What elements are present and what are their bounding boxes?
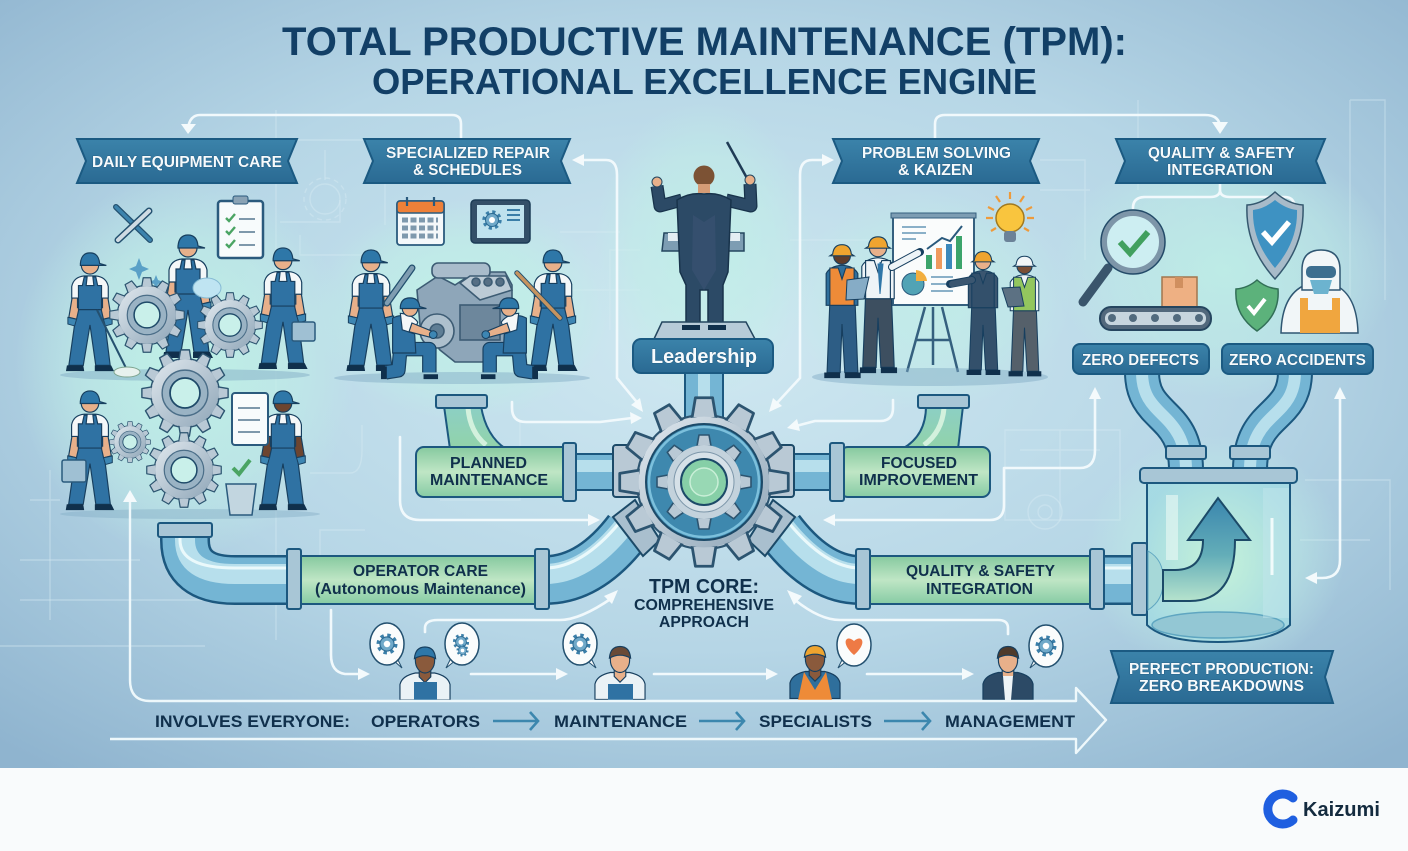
kaizen team [812,237,1048,386]
icon: checklist clipboard [218,196,263,258]
pipe: focused improvement [770,395,990,501]
pipe: focused improvement: FOCUSED [881,455,957,472]
person: maintenance with speech bubble [563,623,645,700]
banner: problem solving: PROBLEM SOLVING [862,145,1011,162]
pipe: operator care [158,522,628,609]
banner: perfect production: PERFECT PRODUCTION: [1129,661,1314,678]
big arrow: involves everyone: SPECIALISTS [759,712,872,731]
person: specialist with speech bubble [790,624,871,700]
banner: perfect production [1111,651,1333,703]
banner: quality and safety: QUALITY & SAFETY [1148,145,1295,162]
icon: crossed tools [116,207,150,240]
banner: daily equipment care [77,139,297,183]
workers: repair team [334,250,590,384]
title: OPERATIONAL EXCELLENCE ENGINE [372,61,1037,102]
icon: sparkles [129,258,163,289]
icon: magnifier with check [1083,210,1165,302]
banner: specialized repair [364,139,570,183]
big arrow: involves everyone: MANAGEMENT [945,712,1076,731]
banner: daily equipment care: DAILY EQUIPMENT CARE [92,154,282,171]
icon: calendar [397,197,444,245]
text: TPM core: COMPREHENSIVE [634,597,774,614]
big arrow: involves everyone: INVOLVES EVERYONE: [155,712,350,731]
pipe: quality and safety integration [780,522,1147,615]
leadership pipe [684,370,724,420]
icon: green safety shield [1236,280,1278,331]
logo: Kaizumi: Kaizumi [1303,799,1380,821]
text: TPM core [634,576,774,631]
pipe: quality and safety integration: INTEGRATION [926,581,1033,598]
big arrow: involves everyone: MAINTENANCE [554,712,687,731]
glow: repair [312,200,612,420]
flip chart presentation [891,213,976,372]
banner: problem solving: & KAIZEN [898,162,973,179]
pipe: operator care: OPERATOR CARE [353,563,488,580]
workers: daily equipment care, bottom [60,391,320,519]
banner: specialized repair: SPECIALIZED REPAIR [386,145,550,162]
gears: daily equipment care [109,278,262,507]
label: zero accidents [1222,344,1373,374]
banner: perfect production: ZERO BREAKDOWNS [1139,678,1304,695]
pipe: operator care: (Autonomous Maintenance) [315,581,526,598]
banner: quality and safety [1116,139,1325,183]
pipe: planned maintenance: MAINTENANCE [430,472,548,489]
title: TOTAL PRODUCTIVE MAINTENANCE (TPM): [282,20,1127,64]
big arrow: involves everyone: OPERATORS [371,712,480,731]
footer strip [0,768,1408,851]
icon: conveyor with box [1100,277,1211,330]
tank: perfect production [1140,468,1297,642]
pipe: focused improvement: IMPROVEMENT [859,472,978,489]
label: zero accidents: ZERO ACCIDENTS [1229,352,1366,369]
label: zero defects [1073,344,1209,374]
text: TPM core: TPM CORE: [649,576,759,598]
glow: tank [1085,435,1345,675]
banner: quality and safety: INTEGRATION [1167,162,1273,179]
pipe: planned maintenance [416,395,640,501]
big arrow: involves everyone [110,490,1106,753]
glow: leadership [594,100,814,400]
circuit background lines [0,100,1390,646]
pipes to tank from zero labels [1142,372,1295,470]
hazmat worker [1281,250,1358,333]
label: leadership: Leadership [651,346,757,368]
banner: problem solving [833,139,1039,183]
title [282,20,1127,102]
pipe: planned maintenance: PLANNED [450,455,527,472]
glow: quality and safety [1055,140,1395,400]
conductor: leadership figure [652,142,755,339]
glow: kaizen [790,190,1070,410]
banner: specialized repair: & SCHEDULES [413,162,522,179]
flow arrows [181,115,1346,680]
label: zero defects: ZERO DEFECTS [1082,352,1199,369]
label: leadership [633,339,773,373]
icon: blue safety shield [1247,192,1303,279]
icon: tablet [471,200,530,243]
logo: Kaizumi [1268,794,1380,824]
text: TPM core: APPROACH [659,614,749,631]
workers: daily equipment care, top [60,235,315,381]
glow: daily care [15,175,355,555]
person: operator with speech bubbles [370,623,479,700]
central gear: TPM core [613,398,795,566]
engine [417,263,512,362]
person: manager with speech bubble [983,625,1063,700]
pipe: quality and safety integration: QUALITY & SAFETY [906,563,1055,580]
icon: light bulb [986,192,1034,242]
